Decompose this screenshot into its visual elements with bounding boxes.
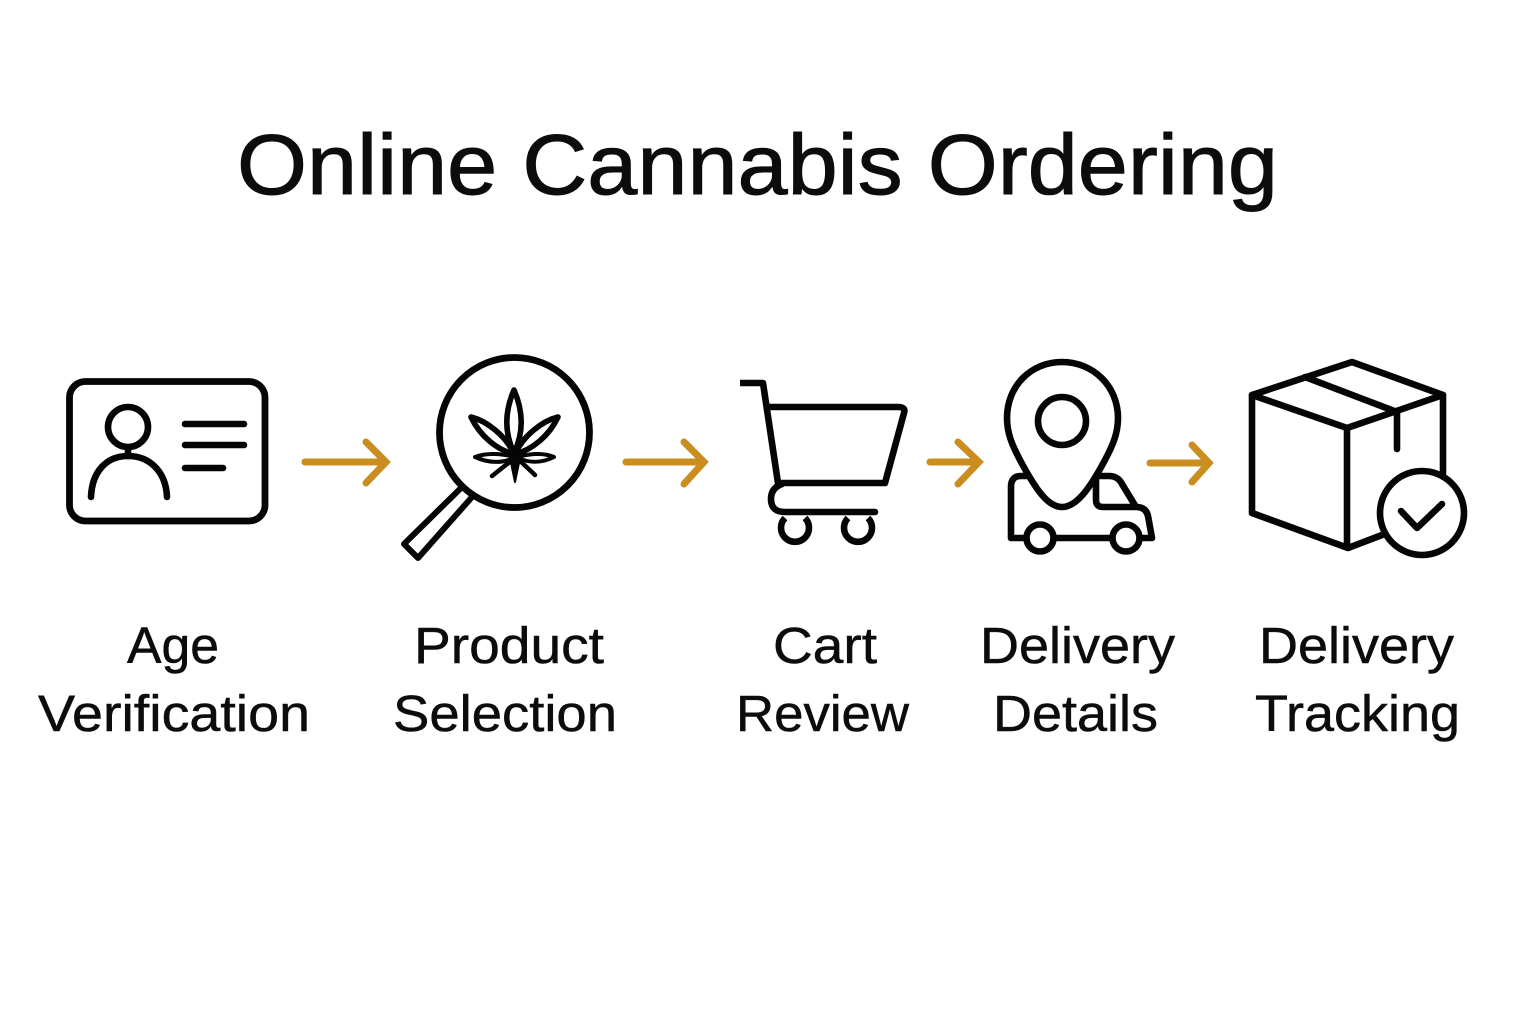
arrow: selection to cart <box>626 442 704 484</box>
label: Cart Review: Cart <box>773 617 877 674</box>
arrow: delivery details to tracking <box>1150 445 1209 482</box>
label: Delivery Tracking: Tracking <box>1255 685 1460 742</box>
label: Product Selection: Selection <box>393 685 617 742</box>
icon: ID card <box>70 382 265 521</box>
label: Product Selection <box>393 617 617 742</box>
label: Delivery Tracking <box>1255 617 1460 742</box>
icon: shopping cart <box>740 383 904 542</box>
label: Delivery Tracking: Delivery <box>1259 617 1455 674</box>
label: Delivery Details: Details <box>993 685 1158 742</box>
icon: parcel box with check mark <box>1252 362 1464 555</box>
icon: magnifier with cannabis leaf <box>404 358 590 558</box>
label: Age Verification <box>38 617 310 742</box>
label: Age Verification: Verification <box>38 685 310 742</box>
label: Delivery Details <box>980 617 1176 742</box>
cannabis leaf <box>471 390 558 482</box>
label: Cart Review <box>736 617 909 742</box>
arrow: cart to delivery details <box>930 442 979 484</box>
arrow: verification to selection <box>305 442 386 483</box>
label: Product Selection: Product <box>414 617 604 674</box>
label: Cart Review: Review <box>736 685 909 742</box>
label: Age Verification: Age <box>127 617 219 674</box>
icon: location pin with delivery van <box>1007 362 1152 552</box>
title: Online Cannabis Ordering <box>237 118 1278 213</box>
label: Delivery Details: Delivery <box>980 617 1176 674</box>
